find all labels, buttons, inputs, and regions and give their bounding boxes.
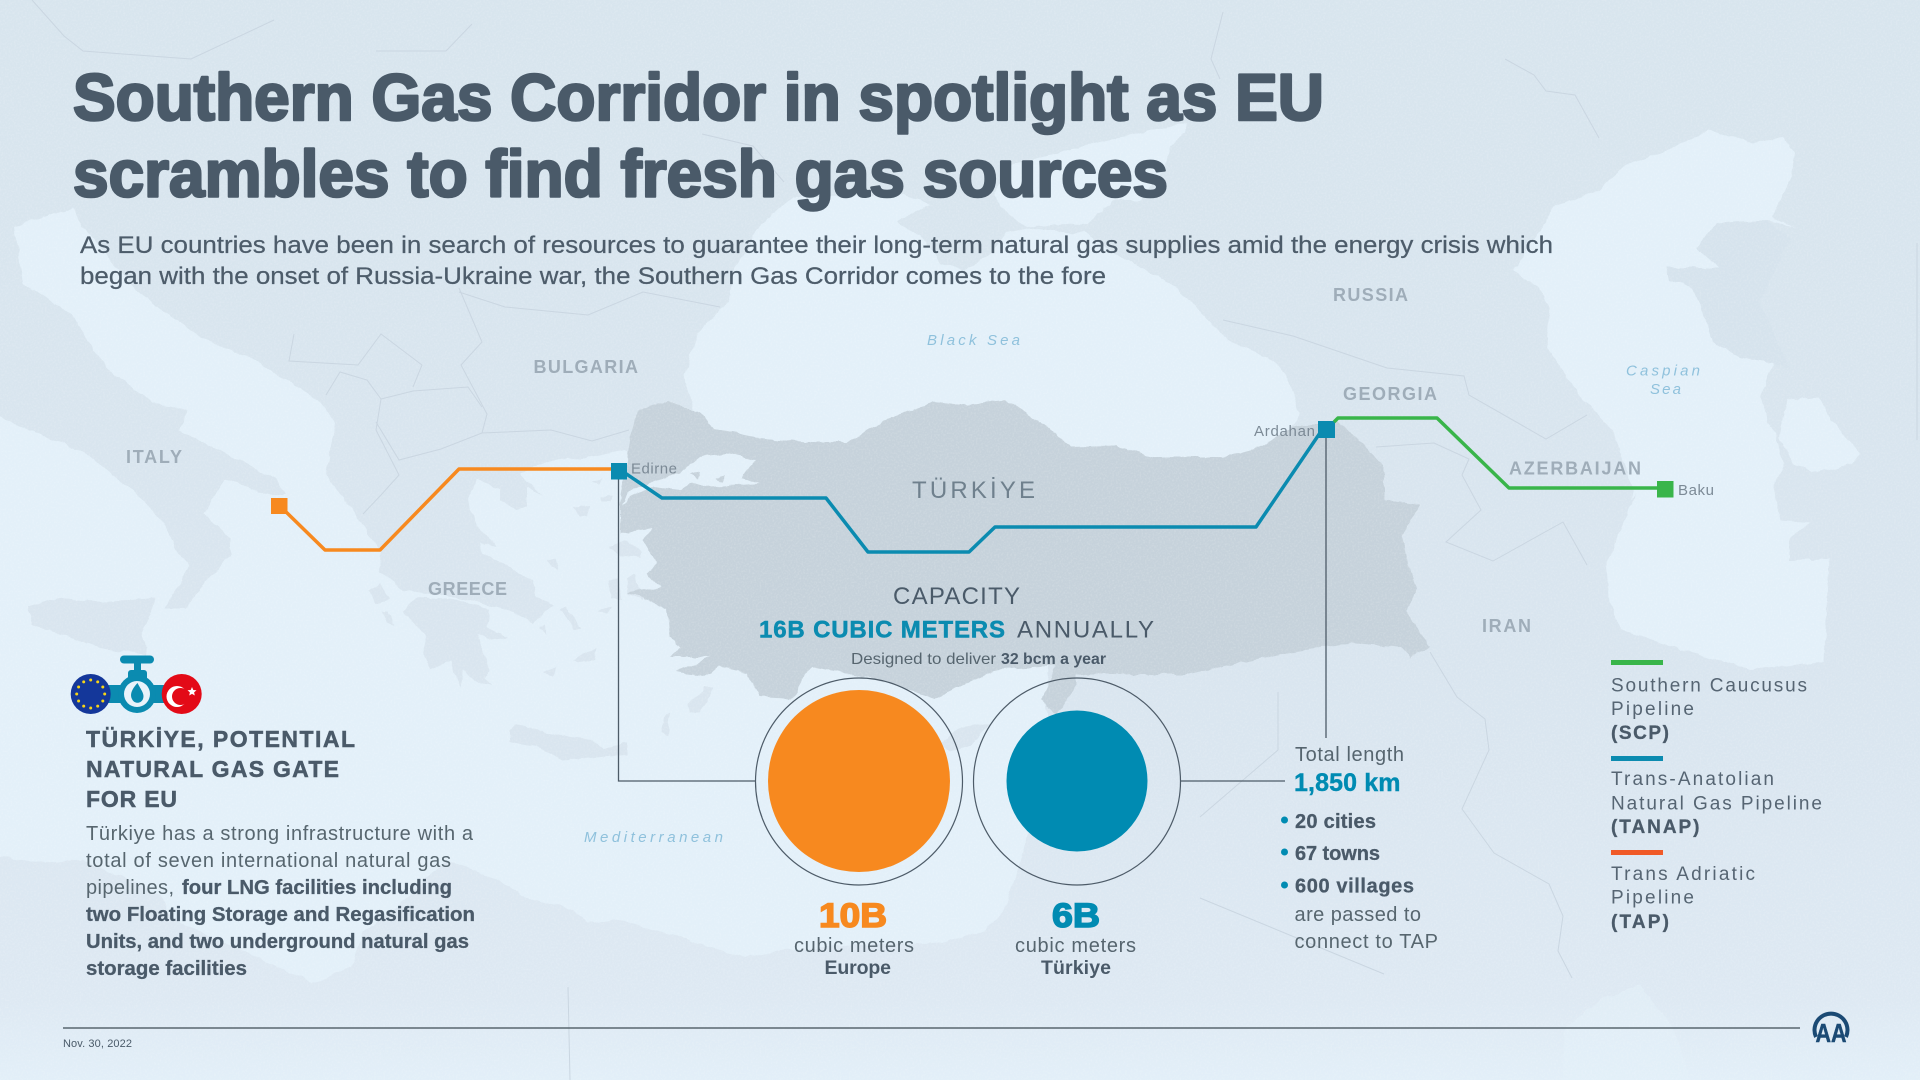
map labels: Black Sea bbox=[927, 332, 1020, 349]
subtitle bbox=[80, 232, 1553, 290]
decorative islands bbox=[28, 480, 990, 760]
Türkiye shape bbox=[620, 400, 1430, 715]
subtitle: began with the onset of Russia-Ukraine war, the Southern Gas Corridor comes to the fore bbox=[80, 263, 1106, 290]
text block: infrastructure: four LNG facilities including bbox=[182, 877, 452, 899]
total length block: are passed to bbox=[1294, 904, 1421, 926]
capacity block: 16B CUBIC METERS bbox=[759, 616, 1005, 644]
map labels: RUSSIA bbox=[1333, 285, 1408, 305]
icon: gas valve between EU and Turkish flags bbox=[71, 659, 202, 714]
circle chart: Europe 10B: 10B bbox=[819, 897, 887, 935]
total length block bbox=[1281, 744, 1438, 953]
map labels: BULGARIA bbox=[534, 357, 638, 377]
map labels: GEORGIA bbox=[1343, 384, 1437, 404]
capacity block: Designed to deliver bbox=[851, 651, 997, 668]
total length block: Total length bbox=[1295, 744, 1404, 766]
total length block: connect to TAP bbox=[1294, 931, 1438, 953]
total length block: 67 towns bbox=[1295, 843, 1380, 865]
map labels: Sea bbox=[1650, 381, 1681, 398]
capacity block bbox=[759, 583, 1154, 668]
text block: infrastructure: storage facilities bbox=[86, 958, 247, 980]
text block: infrastructure: pipelines, bbox=[86, 877, 174, 899]
total length block: 600 villages bbox=[1295, 876, 1414, 898]
subtitle: As EU countries have been in search of resources to guarantee their long-term natural gas supplies amid the energy crisis which bbox=[80, 232, 1553, 259]
map labels: ITALY bbox=[126, 447, 182, 467]
circle chart: Türkiye 6B: 6B bbox=[1052, 897, 1100, 935]
legend bbox=[1611, 660, 1822, 933]
capacity block: 32 bcm a year bbox=[1001, 651, 1106, 668]
legend: Pipeline bbox=[1611, 699, 1694, 720]
icon: AA logo: AA bbox=[1816, 1018, 1847, 1048]
circle chart: Türkiye 6B: cubic meters bbox=[1015, 935, 1136, 957]
legend: (SCP) bbox=[1611, 723, 1669, 744]
Marmara sea bbox=[622, 453, 760, 506]
total length block: 20 cities bbox=[1295, 811, 1376, 833]
map labels: Edirne bbox=[631, 460, 677, 478]
legend: Natural Gas Pipeline bbox=[1611, 794, 1822, 814]
legend: Trans-Anatolian bbox=[1611, 769, 1774, 790]
legend: Trans Adriatic bbox=[1611, 864, 1755, 885]
legend: Southern Caucusus bbox=[1611, 676, 1807, 696]
text block: infrastructure: Türkiye has a strong infrastructure with a bbox=[86, 823, 474, 845]
text block: infrastructure: total of seven international natural gas bbox=[86, 850, 451, 872]
map labels: Caspian bbox=[1626, 362, 1700, 380]
total length block: 1,850 km bbox=[1294, 769, 1400, 797]
map labels: Ardahan bbox=[1254, 423, 1315, 440]
circle chart: Europe 10B: Europe bbox=[824, 957, 891, 979]
heading: Türkiye gas gate: NATURAL GAS GATE bbox=[86, 756, 339, 782]
pipeline: TAP bbox=[271, 469, 615, 550]
title bbox=[73, 60, 1324, 210]
circle chart: Europe 10B: cubic meters bbox=[794, 935, 914, 957]
heading: Türkiye gas gate bbox=[86, 726, 355, 812]
legend: (TANAP) bbox=[1611, 817, 1700, 838]
map labels: IRAN bbox=[1482, 616, 1531, 636]
legend: (TAP) bbox=[1611, 912, 1669, 933]
map labels: TÜRKİYE bbox=[912, 477, 1035, 504]
text block: infrastructure: Units, and two underground natural gas bbox=[86, 931, 469, 953]
text block: infrastructure bbox=[86, 823, 475, 980]
pipeline: TANAP bbox=[611, 421, 1335, 552]
title: Southern Gas Corridor in spotlight as EU bbox=[73, 60, 1324, 134]
legend: Pipeline bbox=[1611, 888, 1694, 908]
title: scrambles to find fresh gas sources bbox=[73, 136, 1168, 210]
pipeline: SCP bbox=[1334, 418, 1674, 498]
map labels: GREECE bbox=[428, 579, 507, 599]
footer rule and date: Nov. 30, 2022 bbox=[63, 1038, 132, 1050]
map labels: Mediterranean bbox=[584, 829, 723, 846]
capacity block: CAPACITY bbox=[893, 583, 1020, 610]
text block: infrastructure: two Floating Storage and Regasification bbox=[86, 904, 475, 926]
circle chart: Europe 10B bbox=[756, 678, 962, 979]
leader lines bbox=[618, 430, 1326, 781]
capacity block: ANNUALLY bbox=[1017, 616, 1154, 644]
heading: Türkiye gas gate: FOR EU bbox=[86, 786, 177, 812]
map labels: Baku bbox=[1678, 482, 1714, 499]
map labels bbox=[126, 285, 1714, 846]
circle chart: Türkiye 6B bbox=[974, 678, 1180, 979]
circle chart: Türkiye 6B: Türkiye bbox=[1041, 957, 1111, 979]
map labels: AZERBAIJAN bbox=[1509, 458, 1641, 478]
heading: Türkiye gas gate: TÜRKİYE, POTENTIAL bbox=[86, 726, 355, 752]
